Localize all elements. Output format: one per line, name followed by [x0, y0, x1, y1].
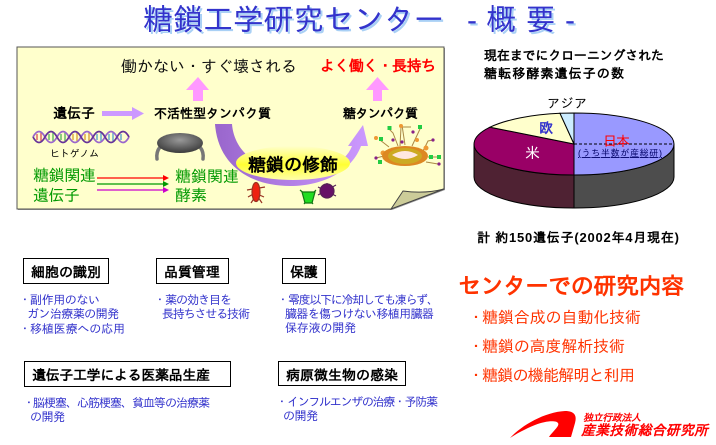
- panel: pathogen infection: 病原微生物の感染: [286, 367, 398, 383]
- text: pathogen infection details: インフルエンザの治療・予防薬: [287, 395, 438, 409]
- panel: protection: 保護: [290, 264, 318, 280]
- text: cell recognition details: ガン治療薬の開発: [27, 307, 119, 321]
- text: pharmaceutical production details: 脳梗塞、心筋梗塞、貧血等の治療薬: [33, 396, 210, 410]
- text: pharmaceutical production details: ・: [23, 396, 35, 410]
- icon: gray inactive protein: [157, 133, 203, 159]
- text: protection details: 臓器を傷つけない移植用臓器: [285, 307, 434, 321]
- slice: Europe: [490, 113, 574, 144]
- text: research list: 糖鎖の機能解明と利用: [482, 367, 635, 385]
- label: human genome: ヒトゲノム: [50, 148, 99, 160]
- text: research list: ・: [468, 368, 484, 385]
- heading: research at the center: センターでの研究内容: [458, 273, 684, 299]
- panel: pathogen infection: [276, 362, 438, 423]
- label: Asia: アジア: [547, 96, 587, 111]
- label: Europe: 欧: [539, 120, 553, 136]
- panel: protection: [277, 258, 439, 335]
- arrow: up left: [186, 77, 209, 101]
- label: glycan related genes: 糖鎖関連: [33, 167, 96, 185]
- text: pharmaceutical production details: の開発: [30, 410, 65, 424]
- arrows: genes to enzymes: [97, 175, 169, 193]
- label: gene: 遺伝子: [53, 105, 95, 121]
- logo name: 独立行政法人: [583, 412, 641, 424]
- title: [143, 4, 575, 37]
- text: cell recognition details: [19, 293, 125, 336]
- panel: quality control: [154, 258, 250, 321]
- text: pathogen infection details: の開発: [283, 409, 318, 423]
- slice: USA: [474, 127, 574, 175]
- total: 計 約150遺伝子(2002年4月現在): [477, 230, 679, 245]
- text: research list: 糖鎖の高度解析技術: [482, 338, 625, 356]
- title: 糖鎖工学研究センター: [143, 4, 444, 37]
- label: glycan related enzymes: [175, 168, 239, 205]
- text: works well, lasts long: よく働く・長持ち: [320, 58, 436, 75]
- text: cell recognition details: ・: [19, 322, 31, 336]
- page fold: [391, 189, 444, 209]
- side: right: [574, 144, 674, 208]
- icon: glycoprotein: [374, 124, 441, 166]
- text: cell recognition details: ・: [19, 293, 31, 307]
- text: does not work, breaks quickly: 働かない・すぐ壊される: [121, 58, 297, 76]
- label: glycan related enzymes: 酵素: [175, 188, 207, 205]
- text: protection details: 零度以下に冷却しても凍らず、: [288, 293, 439, 307]
- icon: DNA helix: [33, 132, 129, 142]
- label: Japan: 日本: [603, 133, 630, 149]
- label: half from AIST: (うち半数が産総研): [578, 148, 662, 158]
- panel: pharmaceutical production by genetic engineering: [23, 362, 230, 424]
- logo swoosh: [510, 411, 576, 438]
- text: quality control details: ・: [154, 293, 166, 307]
- text: cell recognition details: 副作用のない: [30, 293, 100, 307]
- label: glycoprotein: 糖タンパク質: [343, 106, 418, 121]
- text: protection details: ・: [277, 293, 289, 307]
- text: research list: [468, 309, 641, 385]
- callout: glycan modification: [236, 146, 350, 180]
- label: inactive protein: 不活性型タンパク質: [154, 106, 271, 121]
- text: quality control details: 長持ちさせる技術: [162, 307, 250, 321]
- arrow: up right: [366, 77, 389, 101]
- label: USA: 米: [525, 145, 540, 162]
- heading: number of cloned glycosyltransferase genes: 現在までにクローニングされた: [484, 48, 664, 63]
- icon: green sugar enzyme: [300, 190, 316, 204]
- slice: Asia: [560, 113, 574, 144]
- panel: glycan modification diagram: [17, 47, 445, 210]
- heading: number of cloned glycosyltransferase genes: 糖転移酵素遺伝子の数: [484, 66, 624, 81]
- text: pathogen infection details: [276, 395, 438, 423]
- text: quality control details: [154, 293, 250, 321]
- panel: pharmaceutical production by genetic engineering: 遺伝子工学による医薬品生産: [32, 367, 210, 383]
- pie chart: [474, 113, 674, 208]
- arrow: gene to inactive protein: [102, 107, 144, 120]
- text: pharmaceutical production details: [23, 396, 210, 424]
- label: glycan related enzymes: 糖鎖関連: [175, 168, 239, 186]
- panel: quality control: 品質管理: [164, 264, 220, 280]
- logo name: [581, 412, 710, 438]
- slice: Japan: [574, 113, 674, 175]
- panel: cell recognition: 細胞の識別: [31, 264, 101, 280]
- arrow: curved modification: [215, 124, 368, 186]
- label: glycan related genes: 遺伝子: [33, 187, 80, 205]
- text: protection details: 保存液の開発: [285, 321, 356, 335]
- text: protection details: [277, 293, 439, 335]
- title: - 概 要 -: [467, 4, 575, 37]
- logo name: 産業技術総合研究所: [581, 422, 710, 438]
- heading: number of cloned glycosyltransferase genes: [484, 48, 664, 81]
- panel: cell recognition: [19, 258, 125, 336]
- text: research list: 糖鎖合成の自動化技術: [482, 309, 641, 327]
- text: research list: ・: [468, 339, 484, 356]
- icon: purple sugar enzyme: [318, 183, 336, 198]
- text: pathogen infection details: ・: [276, 395, 288, 409]
- label: glycan related genes: [33, 167, 96, 205]
- text: quality control details: 薬の効き目を: [165, 293, 232, 307]
- text: research list: ・: [468, 310, 484, 327]
- callout: glycan modification: 糖鎖の修飾: [248, 155, 338, 175]
- logo: AIST: [510, 411, 710, 438]
- text: cell recognition details: 移植医療への応用: [30, 322, 125, 336]
- icon: red sugar enzyme: [247, 182, 265, 203]
- side: left: [474, 144, 574, 208]
